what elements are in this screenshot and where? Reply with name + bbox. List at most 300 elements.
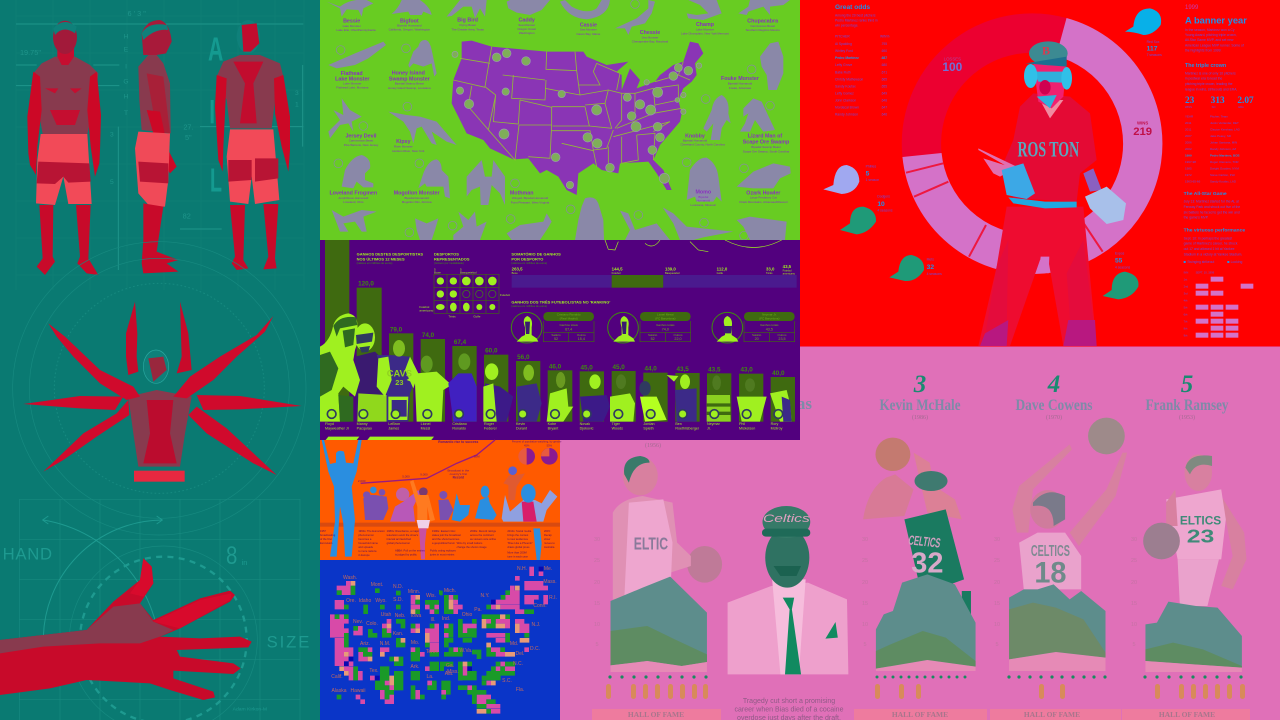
hall of fame labels: HALL OF FAME <box>1024 710 1080 719</box>
state labels: S.D. <box>393 597 403 603</box>
pie charts: Percent of population watching, by gender <box>512 440 562 444</box>
creature labels: Scape Ore Swamp <box>743 140 790 146</box>
athlete names: Pacquiao <box>357 426 372 430</box>
athlete names: Roethlisberger <box>675 426 700 430</box>
timeline captions: 2010s: Social media <box>507 529 532 533</box>
timeline captions: More than 200M <box>507 550 527 554</box>
timeline captions: 1980s: Riverdance, a major <box>387 529 419 533</box>
chart axis values: 25 <box>594 558 600 564</box>
hall of fame labels: HALL OF FAME <box>1159 710 1215 719</box>
panel: cryptids map: Carnivorous Beast <box>349 139 373 143</box>
figures: front, side and back views: H <box>124 93 129 100</box>
figures: front, side and back views: H <box>124 33 129 40</box>
earnings by sport bar: Futebol <box>783 268 792 272</box>
timeline captions: Wins by small nations <box>457 541 483 545</box>
A banner year text column: 5th <box>1184 306 1188 310</box>
player 1: ELTIC <box>634 533 668 553</box>
A banner year text column: 1972 <box>1185 173 1192 177</box>
footballer cards: 52 <box>651 337 655 341</box>
earnings by sport bar: Boxe <box>512 271 518 275</box>
side view figure <box>135 20 178 273</box>
timeline line: Romantic rise to success <box>438 440 479 444</box>
sports represented grid: Futebol <box>500 293 510 297</box>
timeline captions: ABBA: Poll on the entries <box>395 549 425 553</box>
sports represented grid: americano <box>419 308 434 312</box>
A banner year text column: out 17 and allowed 1 hit at Yankee <box>1184 247 1235 251</box>
state labels: Mass. <box>543 579 557 585</box>
A banner year text column: INN <box>1184 270 1188 274</box>
A banner year text column: the highlights from 1999: <box>1185 49 1222 53</box>
championship trophies <box>606 684 1245 699</box>
A banner year text column: 1st <box>1184 278 1187 282</box>
Great odds table: .795 <box>881 42 887 46</box>
creature labels: Cassie <box>580 22 597 28</box>
A banner year text column: 2nd <box>1184 285 1189 289</box>
footballer cards: Salário <box>752 333 762 337</box>
creature labels <box>329 18 790 197</box>
state labels: Ala. <box>445 671 453 677</box>
state labels: Tenn. <box>426 649 438 655</box>
timeline captions: interval act launched <box>387 537 412 541</box>
figure: hand size diagram: SIZE <box>267 632 309 651</box>
A banner year text column: 2011 <box>1185 127 1192 131</box>
earnings by sport bar: Basquetebol <box>665 271 680 275</box>
Great odds table: WIN% <box>880 35 889 39</box>
A banner year text column: Martínez is one of only 10 pitchers <box>1185 71 1236 75</box>
A banner year text column: Sandy Koufax, LAD <box>1210 180 1237 184</box>
timeline captions: and spreads <box>358 545 374 549</box>
panel: cryptids map: Lake Champlain, New York/Vermont <box>681 31 729 35</box>
state labels: Idaho <box>359 598 371 604</box>
panel: cryptids map: California, Oregon, Washington <box>389 28 430 32</box>
figure: hand size diagram <box>0 499 309 720</box>
figures: front, side and back views: 5 <box>110 179 114 186</box>
earnings values: 43,5 <box>708 366 721 373</box>
chart axis values: 15 <box>994 601 1000 607</box>
team caps with win counts: Red Sox <box>1147 40 1160 44</box>
athlete names: Spieth <box>643 426 654 430</box>
A banner year text column: SEPT. 10, 1999 <box>1196 270 1215 274</box>
A banner year text column: 1999 <box>1185 5 1199 11</box>
creature labels: Kipsy <box>396 139 411 145</box>
panel: cryptids map: Honey Island Swamp, Louisiana <box>388 86 431 90</box>
athlete names: Floyd <box>325 422 334 426</box>
A banner year text column: The All-Star Game <box>1184 191 1227 197</box>
earnings by sport bar <box>512 264 797 288</box>
player 1 <box>611 456 722 672</box>
panel: cryptids map: Bipedal Humanoid <box>683 138 708 142</box>
A banner year text column: The virtuoso performance <box>1184 228 1245 234</box>
state labels: Ark. <box>411 664 419 670</box>
sport icons on athletes <box>327 410 783 418</box>
panel: orange timeline <box>320 440 562 560</box>
section headings: POR DESPORTO <box>511 256 543 261</box>
panel: highest paid athletes <box>320 240 800 440</box>
Great odds table: John Clarkson <box>835 99 856 103</box>
pie charts <box>512 440 562 465</box>
figures: front, side and back views: 19.75" <box>20 48 41 57</box>
hall of fame labels: HALL OF FAME <box>892 710 948 719</box>
footballer cards: Outros <box>577 333 586 337</box>
timeline line: country's first <box>450 472 467 476</box>
panel: cryptids map: Amphibious Humanoid <box>338 196 369 200</box>
player 4: Dave Cowens <box>1009 418 1127 671</box>
state labels: S.C. <box>502 678 512 684</box>
A banner year text column: July 13: Martínez started for the AL at <box>1184 200 1239 204</box>
state labels: Pa. <box>474 607 482 613</box>
creature labels: Flathead <box>341 71 363 77</box>
player 4: Dave Cowens: CELTICS <box>1031 543 1070 560</box>
panel: cryptids map: River Monster <box>394 145 413 149</box>
back view figure <box>215 20 290 270</box>
footballer cards: 67,4 <box>565 328 572 332</box>
athlete names: LeBron <box>388 422 400 426</box>
state labels: W.Va. <box>460 648 472 654</box>
panel: cryptids map: Lake Erie, Ohio/Pennsylvania <box>336 28 376 32</box>
state labels: Ind. <box>442 616 450 622</box>
chart axis values: 15 <box>594 601 600 607</box>
panel: cryptids map: Lake Monster <box>343 24 361 28</box>
creature labels: Caddy <box>519 18 535 24</box>
athlete names: Rory <box>771 422 779 426</box>
Great odds table: .665 <box>881 77 887 81</box>
sports represented grid: Boxe <box>434 271 441 275</box>
footballer cards: Salário <box>551 333 561 337</box>
creature labels: Bessie <box>343 19 360 25</box>
Great odds table: .655 <box>881 84 887 88</box>
figures: front, side and back views: E <box>124 47 129 54</box>
figure: hand size diagram: in <box>242 558 247 567</box>
state labels: Mich. <box>444 588 456 594</box>
timeline captions: Eurovision <box>320 541 333 545</box>
athlete names: Manny <box>357 422 368 426</box>
chart axis values: 5 <box>995 642 999 648</box>
timeline captions: brings the contest <box>507 533 529 537</box>
panel: cryptids map: Bipedal Swamp Beast <box>395 82 424 86</box>
player headings: (1986) <box>912 414 928 421</box>
panel: cryptids map: Winged, Bipedal Humanoid <box>512 196 548 200</box>
footballer cards: Neymar Jr. <box>762 312 777 316</box>
athlete names: Novak <box>580 422 590 426</box>
athlete names: Roger <box>484 422 495 426</box>
A banner year text column: game of Martínez's career, he struck <box>1184 242 1238 246</box>
Len Bias caption: career when Bias died of a cocaine <box>735 706 844 714</box>
A banner year text column: Looking <box>1231 260 1242 264</box>
earnings by sport bar: Ténis <box>766 271 773 275</box>
team caps with win counts: 55 <box>1115 258 1123 265</box>
A banner year text column <box>1184 5 1254 338</box>
panel: cryptids map: Flying Beast <box>459 23 476 27</box>
team caps with win counts: Dodgers <box>877 194 890 198</box>
panel: cryptids map: Oregon Coast <box>517 27 536 31</box>
panel: cryptids map: Hudson River, New York <box>392 149 425 153</box>
sports represented grid <box>419 268 510 319</box>
player headings: Kevin McHale <box>880 397 960 414</box>
state labels: Wyo. <box>375 598 387 604</box>
athlete names: Ben <box>675 422 682 426</box>
chart axis values: 5 <box>595 642 599 648</box>
chart axis values: 10 <box>994 622 1000 628</box>
timeline captions: of the first <box>320 537 332 541</box>
figures: front, side and back views: A <box>208 32 223 69</box>
athlete names: Durant <box>516 426 527 430</box>
earnings by sport bar: 112,0 <box>717 267 728 272</box>
A banner year text column: league in wins, strikeouts and ERA. <box>1185 87 1237 91</box>
state labels: N.M. <box>380 641 390 647</box>
state labels: Neb. <box>395 613 405 619</box>
panel: highest paid athletes: (número por modalidade) <box>434 261 464 265</box>
state labels: Kan. <box>393 631 403 637</box>
A banner year text column: 23 <box>1185 96 1195 106</box>
footballer cards: Ganhos totais <box>656 323 675 327</box>
athlete names: Phil <box>739 422 745 426</box>
panel: cryptids map: Carnivorous Beast <box>750 24 775 28</box>
Great odds table: Randy Johnson <box>835 113 858 117</box>
figures: front, side and back views: 27. <box>183 122 194 131</box>
player headings: Len Bias <box>748 394 812 413</box>
creature labels: Mothman <box>510 191 534 197</box>
chart axis values: 10 <box>862 622 868 628</box>
player headings: (1953) <box>1179 414 1195 421</box>
athlete names <box>325 422 783 430</box>
chart axis values: 20 <box>1131 580 1137 586</box>
A banner year text column: Clayton Kershaw, LAD <box>1210 127 1241 131</box>
A banner year text column: 9th <box>1184 334 1188 338</box>
team caps with win counts <box>823 8 1162 299</box>
pie charts: 45% <box>524 444 530 448</box>
panel: cryptids map: Scape Ore Swamp, South Carolina <box>743 149 790 153</box>
team caps with win counts: Expos <box>1115 251 1125 255</box>
timeline captions: moves to <box>544 541 555 545</box>
team caps with win counts: 4 seasons <box>877 209 893 213</box>
footballer cards: Ganhos totais <box>760 323 779 327</box>
A banner year text column: in postwar era to lead the <box>1185 77 1223 81</box>
earnings values: 56,0 <box>517 354 530 361</box>
section headings: SOMATÓRIO DE GANHOS <box>511 252 561 257</box>
team caps with win counts: 7 seasons <box>1147 53 1162 57</box>
creature labels: Momo <box>695 190 712 196</box>
A banner year text column: SO <box>1212 105 1216 109</box>
A banner year text column: 1999 <box>1185 154 1192 158</box>
panel: cryptids map: Sea Monster <box>580 28 597 32</box>
creature labels: Big Bird <box>457 18 478 24</box>
earnings values: 45,0 <box>612 364 625 371</box>
panel: cryptids map: Fouke, Arkansas <box>729 86 752 90</box>
footballer cards: (FC Barcelona) <box>655 316 675 320</box>
player headings: Dave Cowens <box>1016 397 1092 414</box>
panel: cryptids map: Chesapeake Bay, Maryland <box>632 40 669 44</box>
chart axis values: 20 <box>862 580 868 586</box>
state labels: N.D. <box>393 584 403 590</box>
Great odds table: Mordecai Brown <box>835 106 859 110</box>
A banner year text column: All-Star Game MVP, and set new <box>1185 38 1234 42</box>
athlete names: Jordan <box>643 422 655 426</box>
dancer figures <box>322 440 557 560</box>
player 5: Frank Ramsey: ELTICS <box>1180 514 1222 528</box>
A banner year text column: 3rd <box>1184 292 1188 296</box>
Great odds table: Lefty Gomez <box>835 91 854 95</box>
figures: front, side and back views: G <box>123 78 129 85</box>
panel: highest paid athletes: (valores em milhões de euros) <box>511 261 547 265</box>
state labels: Nev. <box>353 619 363 625</box>
chart axis values: 30 <box>1131 537 1137 543</box>
timeline captions: Australia <box>544 545 555 549</box>
chart axis values: 10 <box>594 622 600 628</box>
A banner year text column: Jake Peavy, SD <box>1210 134 1232 138</box>
timeline captions: change the show's image <box>457 545 487 549</box>
state labels: Colo. <box>366 621 378 627</box>
timeline line: 2,000 <box>358 479 366 483</box>
Great odds table: .646 <box>881 113 887 117</box>
chart axis values: 20 <box>594 580 600 586</box>
athlete photographs: CAVS <box>387 369 412 379</box>
figure: hand size diagram: 8 <box>226 542 237 570</box>
timeline captions: television event the show's <box>387 533 419 537</box>
A banner year text column: In the season, Martínez won a Cy <box>1185 28 1235 32</box>
tile grid: eastern states <box>440 567 548 714</box>
Great odds table: Babe Ruth <box>835 70 851 74</box>
athlete photographs: 23 <box>395 378 403 387</box>
footballer cards: Outros <box>778 333 787 337</box>
panel: cryptids map: The Greater Area, Texas <box>451 27 484 31</box>
state labels: Me. <box>544 566 552 572</box>
Great odds table: .690 <box>881 49 887 53</box>
player 5: Frank Ramsey <box>1143 454 1246 672</box>
athlete names: Kevin <box>516 422 525 426</box>
earnings by sport bar: Golfe <box>717 271 724 275</box>
panel: cryptids map: Louisiana, Missouri <box>691 203 716 207</box>
athlete names: Cristiano <box>452 422 467 426</box>
Great odds table: Great odds <box>835 4 870 11</box>
panel: cryptids map: Lake Monster <box>343 81 361 85</box>
figure: arm span diagram <box>13 242 306 535</box>
footballer cards: 52 <box>554 337 558 341</box>
sports represented grid: Basquetebol <box>460 271 477 275</box>
salmon hall of fame bands <box>592 709 1250 720</box>
state labels: Ohio <box>462 612 472 618</box>
A banner year text column: Randy Johnson, AZ <box>1210 147 1236 151</box>
Great odds table: PITCHER <box>835 35 850 39</box>
Great odds table: Pedro Martínez <box>835 56 859 60</box>
panel: cryptids map: Loveland, Ohio <box>343 200 364 204</box>
A banner year text column: 2007 <box>1185 134 1192 138</box>
athlete names: Djokovic <box>580 426 594 430</box>
earnings by sport bar: Futebol <box>612 271 621 275</box>
earnings by sport bar: 33,0 <box>766 267 775 272</box>
figures: front, side and back views: 5" <box>185 133 192 142</box>
chart axis values: 30 <box>594 537 600 543</box>
panel: cryptids map: Ozark Mountains, Arkansas/Missouri <box>739 200 788 204</box>
figures: front, side and back views: T <box>124 110 128 117</box>
earnings values: 43,0 <box>740 367 753 374</box>
footballer cards: (FC Barcelona) <box>759 316 779 320</box>
figures: front, side and back views: 34" <box>75 75 86 84</box>
state labels <box>331 566 557 694</box>
panel: cryptids map: Large Predatory Cat <box>750 196 777 200</box>
donut chart: wins and losses <box>906 33 1152 257</box>
footballer cards: 20 <box>755 337 759 341</box>
athlete names: Lionel <box>421 422 431 426</box>
player 3: Kevin McHale: CELTICS <box>907 533 942 551</box>
footballer cards <box>511 312 795 343</box>
donut chart: wins and losses: 100 <box>942 60 963 74</box>
Great odds table: Whitey Ford <box>835 49 853 53</box>
figure: hand size diagram: HAND <box>3 544 52 563</box>
footballer cards: Cristiano Ronaldo <box>557 312 581 316</box>
panel: Boston pitcher Pedro Martinez <box>800 0 1280 346</box>
panel: cryptids map: Sea Monster <box>642 35 658 39</box>
earnings by sport bar: 139,0 <box>665 267 676 272</box>
earnings bars <box>325 240 795 422</box>
section headings: GANHOS DOS TRÊS FUTEBOLISTAS NO 'RANKING' <box>511 299 610 304</box>
earnings values: 67,4 <box>454 339 467 346</box>
footballer cards: 22,0 <box>674 337 682 341</box>
Great odds table: Christy Mathewson <box>835 77 863 81</box>
donut chart: wins and losses: LOSSES <box>944 57 961 62</box>
footballer cards: Lionel Messi <box>657 312 674 316</box>
state labels: Tex. <box>369 668 379 674</box>
team caps with win counts: 10 <box>877 201 885 208</box>
state labels: Calif. <box>331 674 343 680</box>
chart axis values: 25 <box>1131 558 1137 564</box>
section headings <box>357 252 610 304</box>
A banner year text column: 8th <box>1184 327 1188 331</box>
player 2: Len Bias portrait <box>728 506 848 674</box>
creature labels: Mogollon Monster <box>394 191 440 197</box>
A banner year text column: six batters he faced to get the win and <box>1184 210 1240 214</box>
panel: cryptids map: Bipedal Humanoid <box>397 24 422 28</box>
A banner year text column: 313 <box>1211 96 1225 106</box>
A banner year text column: 7th <box>1184 320 1188 324</box>
timeline captions: states join the broadcast <box>432 533 461 537</box>
athlete names: Bryant <box>548 426 558 430</box>
all-star dots <box>608 675 1243 679</box>
earnings by sport bar: americano <box>783 271 796 275</box>
timeline captions: Recap <box>544 533 552 537</box>
chart axis values: 10 <box>1131 622 1137 628</box>
strikeout waffle chart <box>1196 277 1253 338</box>
chart axis values: 15 <box>1131 601 1137 607</box>
earnings values: 74,0 <box>422 332 435 339</box>
A banner year text column: the game's MVP. <box>1184 216 1209 220</box>
state labels: Utah <box>381 612 391 618</box>
donut chart: wins and losses: WINS <box>1137 120 1148 125</box>
timeline line: Broadcast in the <box>448 469 469 473</box>
A banner year text column: 1985 <box>1185 167 1192 171</box>
player headings: (1970) <box>1046 414 1062 421</box>
creature labels: Chupacabra <box>747 19 778 25</box>
state labels: Miss. <box>447 669 459 675</box>
timeline captions: 1957 <box>320 529 326 533</box>
timeline line: 30M <box>474 454 480 458</box>
footballer cards: (Real Madrid) <box>560 316 578 320</box>
creature labels: Knobby <box>685 133 705 139</box>
player 3: Kevin McHale: 32 <box>911 548 943 579</box>
player headings <box>645 371 1228 449</box>
timeline captions: 2000s: Record ratings <box>470 529 497 533</box>
player headings: 4 <box>1047 371 1060 398</box>
timeline captions: to new audiences <box>507 537 529 541</box>
athlete names: Kobe <box>548 422 556 426</box>
figures: front, side and back views: L <box>210 163 222 200</box>
athlete names: Neymar <box>707 422 721 426</box>
earnings values: 46,0 <box>549 363 562 370</box>
athlete names: McIlroy <box>771 426 783 430</box>
dark date strip <box>320 523 560 527</box>
timeline captions: 1990s: Eastern bloc <box>432 529 456 533</box>
earnings by sport bar: 144,5 <box>612 267 623 272</box>
footballer cards: 74,0 <box>662 328 669 332</box>
